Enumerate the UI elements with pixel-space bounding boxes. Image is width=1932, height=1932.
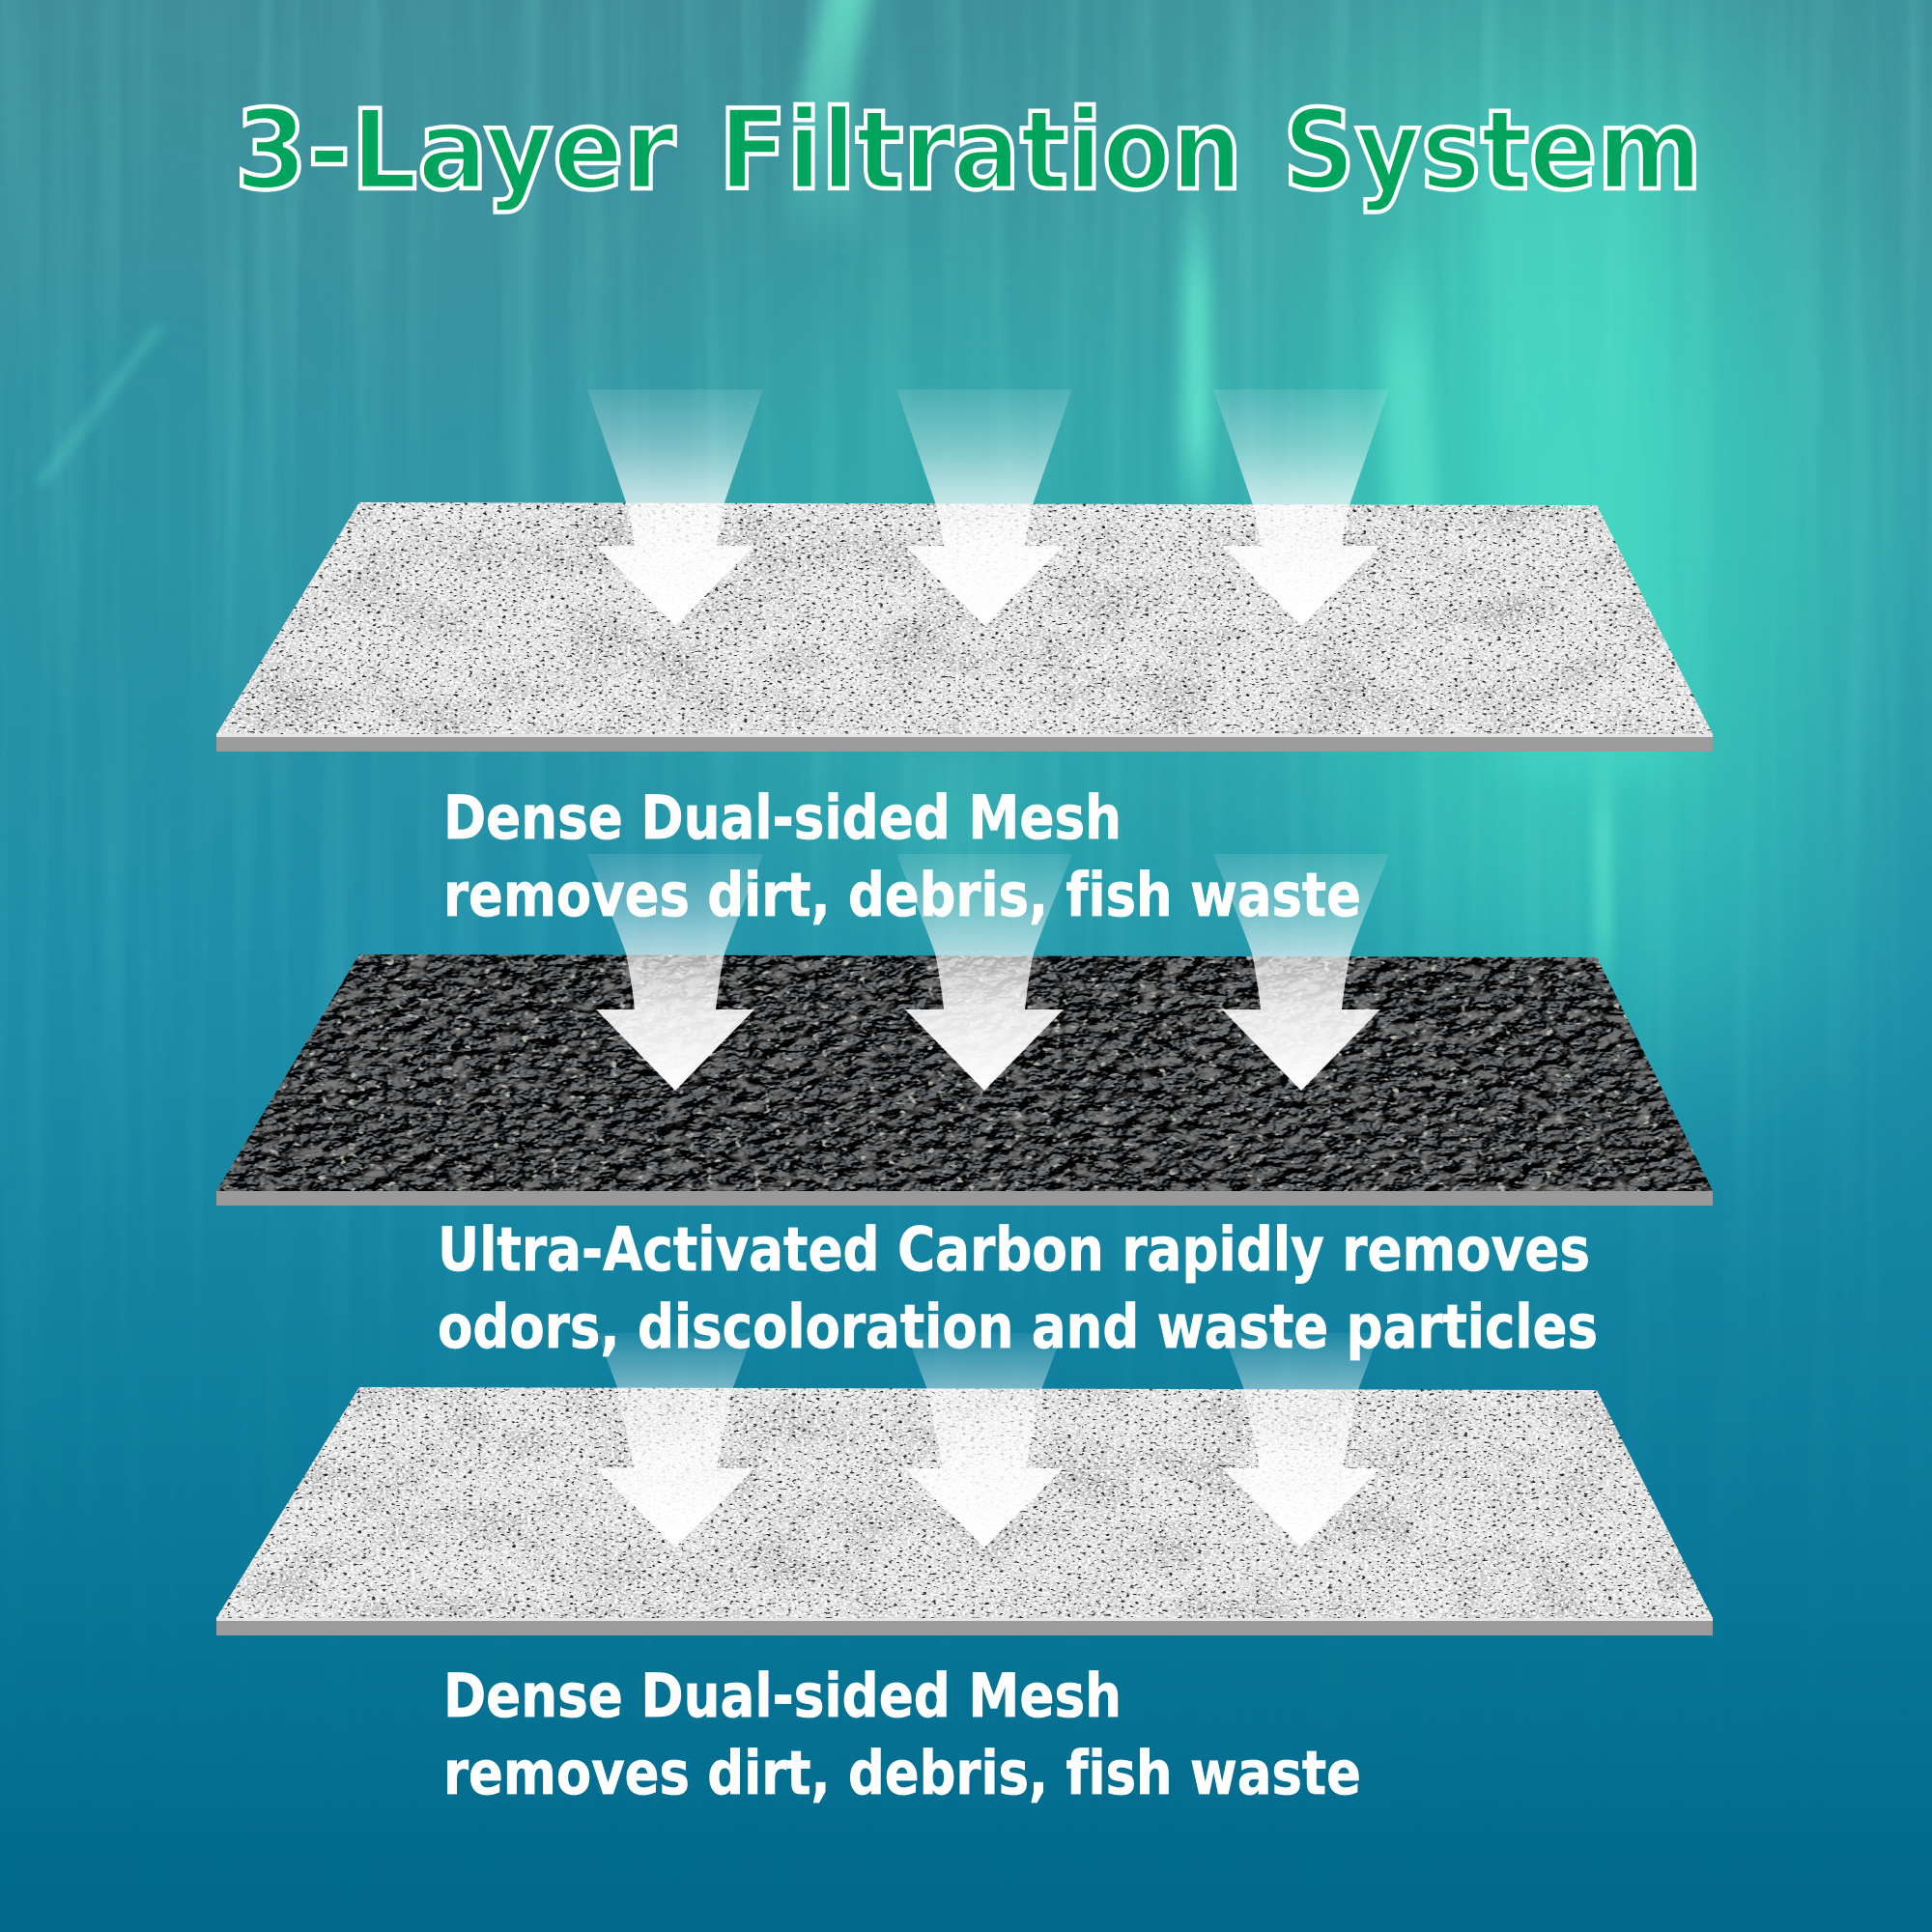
arrow 1 [587,389,763,626]
mesh surface [216,1387,1713,1618]
caption: top mesh: Dense Dual-sided Mesh [443,782,1122,853]
carbon surface [216,954,1713,1191]
arrows through carbon [587,854,1389,1091]
arrow 2 [896,854,1072,1091]
carbon slab edge [216,1191,1713,1206]
panel: bottom mesh layer [216,1387,1713,1635]
arrow 3 [1213,389,1389,626]
panel: top mesh layer [216,502,1713,752]
arrow 2 [896,389,1072,626]
title: Filtration [719,86,1242,214]
caption: top mesh: removes dirt, debris, fish waste [443,860,1361,930]
caption: bottom mesh [443,1661,1361,1808]
title: 3-Layer [235,86,675,214]
caption: activated carbon: odors, discoloration and waste particles [438,1292,1598,1362]
caption: bottom mesh: Dense Dual-sided Mesh [443,1661,1122,1731]
arrow 3 [1213,854,1389,1091]
caption: bottom mesh: removes dirt, debris, fish waste [443,1738,1361,1808]
title: System [1283,86,1702,214]
arrow 1 [587,854,763,1091]
caption: activated carbon [438,1214,1598,1362]
mesh slab edge [216,1621,1713,1635]
caption: top mesh [443,782,1361,930]
mesh highlight edge [216,1617,1713,1621]
mesh highlight edge [216,733,1713,737]
panel: activated carbon layer [216,954,1713,1206]
mesh slab edge [216,737,1713,752]
caption: activated carbon: Ultra-Activated Carbon rapidly removes [438,1214,1590,1285]
arrow 2 [905,1333,1064,1548]
mesh surface [216,502,1713,734]
arrow 1 [596,1333,754,1548]
arrow 3 [1222,1333,1380,1548]
arrows through bottom mesh [596,1333,1380,1548]
title [235,86,1702,214]
arrows through top mesh [587,389,1389,626]
